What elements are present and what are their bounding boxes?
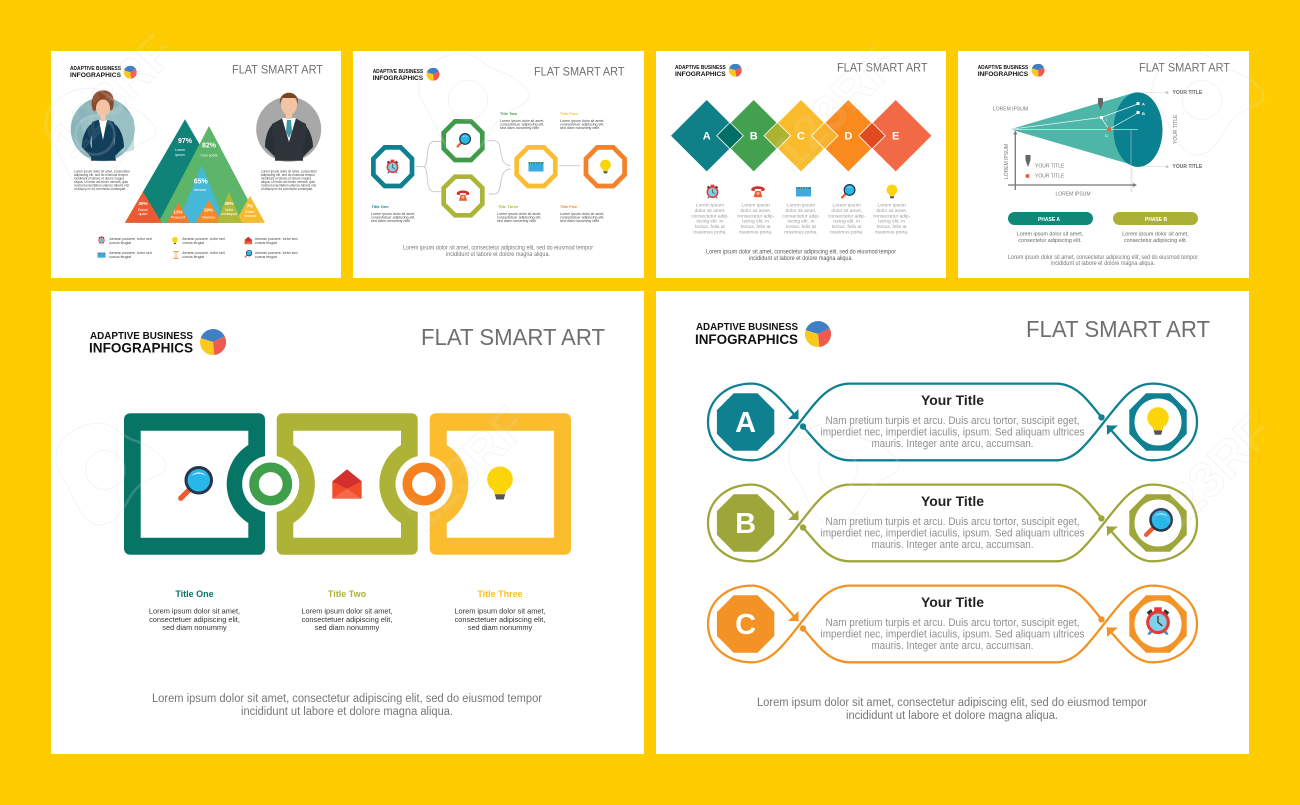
legend: cursus feugiat — [109, 255, 131, 259]
column: title one — [149, 589, 240, 632]
logo: INFOGRAPHICS — [978, 71, 1029, 78]
step texts: sed diam nonummy nibh — [560, 219, 599, 223]
step texts: Lorem ipsum dolor sit amet, — [560, 119, 604, 123]
heading: FLAT SMART ART — [837, 62, 928, 74]
footer text — [706, 250, 896, 262]
logo: INFOGRAPHICS — [89, 340, 193, 356]
diamonds A to E: C — [797, 131, 805, 143]
connectors — [415, 141, 580, 194]
icon: bulb — [487, 466, 513, 500]
column texts: Lorem ipsum — [696, 202, 724, 208]
ring: green — [242, 456, 299, 512]
legend: cursus feugiat — [255, 241, 277, 245]
row B: Nam pretium turpis et arcu. Duis arcu tortor, suscipit eget, — [826, 516, 1080, 528]
panel: cone chart slide — [958, 51, 1249, 278]
step texts: Lorem ipsum dolor sit amet, — [371, 212, 415, 216]
row B: imperdiet nec, imperdiet iaculis, ipsum. Sed aliquam ultrices — [820, 528, 1085, 540]
footer text: Lorem ipsum dolor sit amet, consectetur adipiscing elit, sed do eiusmod tempor — [706, 250, 896, 256]
column texts: dolor sit amet, — [740, 208, 771, 214]
phase B: consectetur adipiscing elit. — [1124, 238, 1187, 244]
footer text — [403, 246, 593, 258]
text: right description: ut aliquip ex ea commodo consequat. — [261, 187, 313, 191]
panel: infinity loops slide — [656, 291, 1249, 754]
row C: Your Title — [921, 594, 984, 610]
text: 123RF — [393, 396, 539, 542]
column: title three — [454, 589, 546, 632]
panel: mountains and people slide — [51, 51, 341, 278]
column: title two — [301, 589, 393, 632]
cone chart: YOUR TITLE — [1173, 114, 1179, 144]
column texts: lectus, felis at — [832, 224, 862, 230]
row A: mauris. Integer ante arcu, accumsan. — [872, 438, 1034, 450]
legend: cursus feugiat — [109, 241, 131, 245]
cone chart: YOUR TITLE — [1172, 90, 1203, 96]
text: left description: nostrud exercitation ullamco laboris nisi — [74, 184, 129, 188]
row C: C — [735, 609, 756, 641]
row A: Nam pretium turpis et arcu. Duis arcu tortor, suscipit eget, — [826, 415, 1080, 427]
footer text: Lorem ipsum dolor sit amet, consectetur adipiscing elit, sed do eiusmod tempor — [757, 697, 1147, 709]
heading: FLAT SMART ART — [1139, 62, 1230, 74]
column texts: Lorem ipsum — [878, 202, 906, 208]
footer text: incididunt ut labore et dolore magna aliqua. — [446, 252, 550, 258]
panel: three linked frames slide — [51, 291, 644, 754]
column texts: maximus porta. — [739, 230, 772, 236]
column: title one: consectetuer adipiscing elit, — [149, 615, 240, 624]
row B: Your Title — [921, 493, 984, 509]
row A — [708, 384, 1197, 460]
column: title one: Title One — [175, 589, 214, 599]
chart: overlapping triangles: Lorem — [175, 148, 185, 152]
column: title two: consectetuer adipiscing elit, — [302, 615, 392, 624]
step texts: consectetuer adipiscing elit, — [560, 122, 604, 126]
legend — [98, 236, 297, 259]
column texts: Lorem ipsum — [833, 202, 861, 208]
heading: FLAT SMART ART — [534, 66, 624, 78]
column texts: Lorem ipsum — [787, 202, 815, 208]
node: yellow octagon with window — [517, 147, 555, 186]
cone chart — [993, 90, 1203, 198]
frame three — [430, 413, 571, 555]
node: teal octagon with clock — [373, 147, 412, 186]
frame one — [124, 413, 265, 555]
text: right description: incididunt ut labore et dolore magna — [261, 176, 311, 180]
column texts: consectetur adip- — [873, 213, 911, 219]
phase B: PHASE B — [1145, 217, 1167, 223]
chart: overlapping triangles: Vivamus — [202, 216, 215, 220]
column: title two: sed diam nonummy — [315, 623, 380, 632]
step texts: Title Three — [498, 204, 519, 209]
text: right description: Lorem ipsum dolor sit amet, consectetur — [261, 170, 318, 174]
column: title two: Title Two — [328, 589, 367, 599]
chart: overlapping triangles: 19% — [204, 208, 213, 212]
chart: overlapping triangles: 30% — [138, 201, 148, 206]
logo: INFOGRAPHICS — [373, 75, 424, 82]
logo — [695, 321, 831, 347]
cone chart: B — [1142, 111, 1145, 116]
chart: overlapping triangles: Cum sociis — [200, 154, 218, 158]
legend: cursus feugiat — [182, 255, 204, 259]
phase A — [1008, 212, 1093, 244]
portrait: man — [256, 93, 321, 162]
logo: ADAPTIVE BUSINESS — [978, 65, 1029, 71]
legend: cursus feugiat — [255, 255, 277, 259]
column: title three: consectetuer adipiscing elit, — [455, 615, 545, 624]
chart: overlapping triangles: Nulla — [225, 208, 233, 212]
step texts: consectetuer adipiscing elit, — [500, 122, 544, 126]
column texts: dolor sit amet, — [695, 208, 725, 214]
chart: overlapping triangles: 7% — [247, 204, 253, 208]
text: 123RF — [1138, 403, 1284, 549]
step texts: sed diam nonummy nibh — [500, 126, 539, 130]
column: title three: sed diam nonummy — [468, 623, 533, 632]
column texts: dolor sit amet, — [786, 208, 816, 214]
cone chart: I — [1106, 117, 1107, 122]
cone chart: LOREM IPSUM — [1004, 144, 1010, 179]
footer text: Lorem ipsum dolor sit amet, consectetur adipiscing elit, sed do eiusmod tempor — [152, 693, 542, 705]
column texts: lectus, felis at — [741, 224, 771, 230]
cone chart: D — [1105, 133, 1108, 138]
logo: INFOGRAPHICS — [675, 71, 726, 78]
column: title three: Lorem ipsum dolor sit amet, — [454, 606, 546, 616]
heading: FLAT SMART ART — [232, 64, 323, 76]
diamonds A to E: A — [703, 131, 711, 143]
text: right description: nostrud exercitation ullamco laboris nisi — [261, 184, 316, 188]
chart: overlapping triangles: consequat — [221, 212, 237, 216]
text: right description: adipiscing elit, sed do eiusmod tempor — [261, 173, 316, 177]
column texts: lectus, felis at — [877, 224, 907, 230]
row B: B — [735, 508, 756, 540]
column: title three: Title Three — [477, 589, 523, 599]
logo — [978, 64, 1045, 78]
column texts: maximus porta. — [693, 230, 727, 236]
logo — [70, 66, 137, 79]
logo: ADAPTIVE BUSINESS — [373, 69, 424, 75]
cone chart: LOREM IPSUM — [993, 106, 1028, 112]
chart: overlapping triangles: 97% — [178, 138, 193, 145]
legend: Aenean posuere, tortor sed — [182, 237, 225, 241]
text: right description — [261, 170, 318, 191]
node: olive octagon with phone — [444, 177, 482, 215]
node: green octagon with magnifier — [444, 121, 482, 160]
step texts: consectetuer adipiscing elit, — [371, 216, 415, 220]
text: left description: aliqua. Ut enim ad minim veniam, quis — [74, 180, 128, 184]
logo — [675, 64, 742, 78]
column: title one: sed diam nonummy — [162, 623, 227, 632]
chart: overlapping triangles: Donec — [138, 208, 148, 212]
chart: overlapping triangles: 39% — [224, 201, 234, 206]
column texts: iscing elit. In — [878, 218, 905, 224]
column texts: consectetur adip- — [782, 213, 820, 219]
cone chart: YOUR TITLE — [1035, 174, 1065, 180]
step texts: Title Two — [500, 111, 518, 116]
text: right description: aliqua. Ut enim ad minim veniam, quis — [261, 180, 315, 184]
column texts: consectetur adip- — [737, 213, 775, 219]
phase A: PHASE A — [1038, 217, 1060, 223]
phase B: Lorem ipsum dolor sit amet, — [1122, 232, 1189, 238]
chart: overlapping triangles — [125, 119, 265, 223]
column texts: iscing elit. In — [833, 218, 860, 224]
column texts — [691, 202, 911, 236]
text: left description: ut aliquip ex ea commodo consequat. — [74, 187, 126, 191]
panel: octagon flow slide — [353, 51, 644, 278]
row C: Nam pretium turpis et arcu. Duis arcu tortor, suscipit eget, — [826, 617, 1080, 629]
chart: overlapping triangles: quam — [139, 212, 147, 216]
footer text: Lorem ipsum dolor sit amet, consectetur adipiscing elit, sed do eiusmod tempor — [1008, 255, 1198, 261]
column texts: iscing elit. In — [697, 218, 724, 224]
logo: ADAPTIVE BUSINESS — [90, 330, 193, 342]
cone chart: YOUR TITLE — [1172, 164, 1203, 170]
column texts: iscing elit. In — [742, 218, 769, 224]
legend: Aenean posuere, tortor sed — [109, 251, 152, 255]
chart: overlapping triangles: ipsum — [175, 153, 185, 157]
step texts: Title Four — [560, 111, 579, 116]
footer text: incididunt ut labore et dolore magna aliqua. — [241, 706, 453, 718]
step texts: Lorem ipsum dolor sit amet, — [497, 212, 541, 216]
text: left description — [74, 170, 131, 191]
column texts: maximus porta. — [830, 230, 863, 236]
column texts: Lorem ipsum — [742, 202, 770, 208]
ring: orange — [396, 456, 452, 512]
chart: overlapping triangles: Aenean — [194, 188, 206, 192]
row A: A — [735, 407, 756, 439]
step texts — [371, 111, 604, 223]
icon: magnifier — [181, 468, 212, 498]
row B: mauris. Integer ante arcu, accumsan. — [872, 539, 1034, 551]
logo: ADAPTIVE BUSINESS — [675, 65, 726, 71]
row C: imperdiet nec, imperdiet iaculis, ipsum. Sed aliquam ultrices — [820, 628, 1085, 640]
column texts: lectus, felis at — [786, 224, 816, 230]
step texts: sed diam nonummy nibh — [560, 126, 599, 130]
logo: INFOGRAPHICS — [70, 72, 122, 79]
legend: Aenean posuere, tortor sed — [109, 237, 152, 241]
legend: Aenean posuere, tortor sed — [255, 237, 297, 241]
chart: overlapping triangles: Etiam — [246, 210, 255, 214]
column texts: lectus, felis at — [695, 224, 725, 230]
legend: cursus feugiat — [182, 241, 204, 245]
phase B — [1113, 212, 1198, 244]
diamonds A to E: B — [750, 131, 758, 143]
column texts: consectetur adip- — [691, 213, 729, 219]
logo: ADAPTIVE BUSINESS — [70, 66, 122, 72]
portrait: woman — [71, 90, 135, 161]
step texts: Lorem ipsum dolor sit amet, — [500, 119, 544, 123]
footer text: Lorem ipsum dolor sit amet, consectetur adipiscing elit, sed do eiusmod tempor — [403, 246, 593, 252]
icons row — [707, 185, 897, 198]
column texts: maximus porta. — [784, 230, 818, 236]
chart: overlapping triangles: Praesent — [171, 216, 185, 220]
column: title two: Lorem ipsum dolor sit amet, — [301, 606, 393, 616]
footer text — [152, 693, 542, 718]
step texts: consectetuer adipiscing elit, — [497, 216, 541, 220]
logo — [89, 329, 226, 356]
frame two — [277, 413, 418, 555]
text: 123RF — [761, 36, 907, 182]
legend: Aenean posuere, tortor sed — [182, 251, 225, 255]
text: left description: Lorem ipsum dolor sit amet, consectetur — [74, 170, 131, 174]
cone chart: YOUR TITLE — [1035, 164, 1065, 170]
logo: ADAPTIVE BUSINESS — [696, 321, 798, 333]
footer text: incididunt ut labore et dolore magna aliqua. — [749, 256, 853, 262]
row A: Your Title — [921, 392, 984, 408]
chart: overlapping triangles: 13% — [173, 210, 183, 214]
row A: imperdiet nec, imperdiet iaculis, ipsum. Sed aliquam ultrices — [820, 426, 1085, 438]
text: left description: adipiscing elit, sed do eiusmod tempor — [74, 173, 129, 177]
column texts: maximus porta. — [875, 230, 908, 236]
step texts: Lorem ipsum dolor sit amet, — [560, 212, 604, 216]
heading: FLAT SMART ART — [421, 324, 605, 350]
text: 123RF — [40, 23, 186, 169]
diamonds A to E — [671, 100, 931, 171]
column texts: dolor sit amet, — [876, 208, 907, 214]
row B — [708, 485, 1197, 561]
diamonds A to E: D — [844, 131, 852, 143]
column texts: iscing elit. In — [788, 218, 815, 224]
node: orange octagon with bulb — [586, 147, 625, 186]
column: title one: Lorem ipsum dolor sit amet, — [149, 606, 240, 616]
phase A: Lorem ipsum dolor sit amet, — [1017, 232, 1084, 238]
icon: envelope — [332, 469, 362, 499]
row C — [708, 586, 1197, 662]
chart: overlapping triangles: 82% — [202, 142, 217, 150]
step texts: Title Five — [560, 204, 578, 209]
footer text — [757, 697, 1147, 722]
heading: FLAT SMART ART — [1026, 316, 1210, 342]
step texts: sed diam nonummy nibh — [371, 219, 410, 223]
phase A: consectetur adipiscing elit. — [1018, 238, 1082, 244]
column texts: consectetur adip- — [828, 213, 866, 219]
footer text: incididunt ut labore et dolore magna aliqua. — [846, 710, 1058, 722]
panel: diamonds slide — [656, 51, 946, 278]
cone chart: LOREM IPSUM — [1056, 192, 1091, 198]
diamonds A to E: E — [892, 131, 899, 143]
footer text — [1008, 255, 1198, 267]
column texts: dolor sit amet, — [831, 208, 862, 214]
step texts: sed diam nonummy nibh — [497, 219, 536, 223]
step texts: Title One — [372, 204, 389, 209]
chart: overlapping triangles: rhoncus — [244, 214, 256, 218]
logo: INFOGRAPHICS — [695, 331, 798, 347]
legend: Aenean posuere, tortor sed — [255, 251, 297, 255]
row C: mauris. Integer ante arcu, accumsan. — [872, 640, 1034, 652]
cone chart: A — [1142, 102, 1145, 106]
chart: overlapping triangles: 65% — [194, 178, 208, 186]
footer text: incididunt ut labore et dolore magna aliqua. — [1051, 261, 1155, 267]
logo — [373, 68, 440, 82]
text: left description: incididunt ut labore et dolore magna — [74, 176, 124, 180]
step texts: consectetuer adipiscing elit, — [560, 216, 604, 220]
